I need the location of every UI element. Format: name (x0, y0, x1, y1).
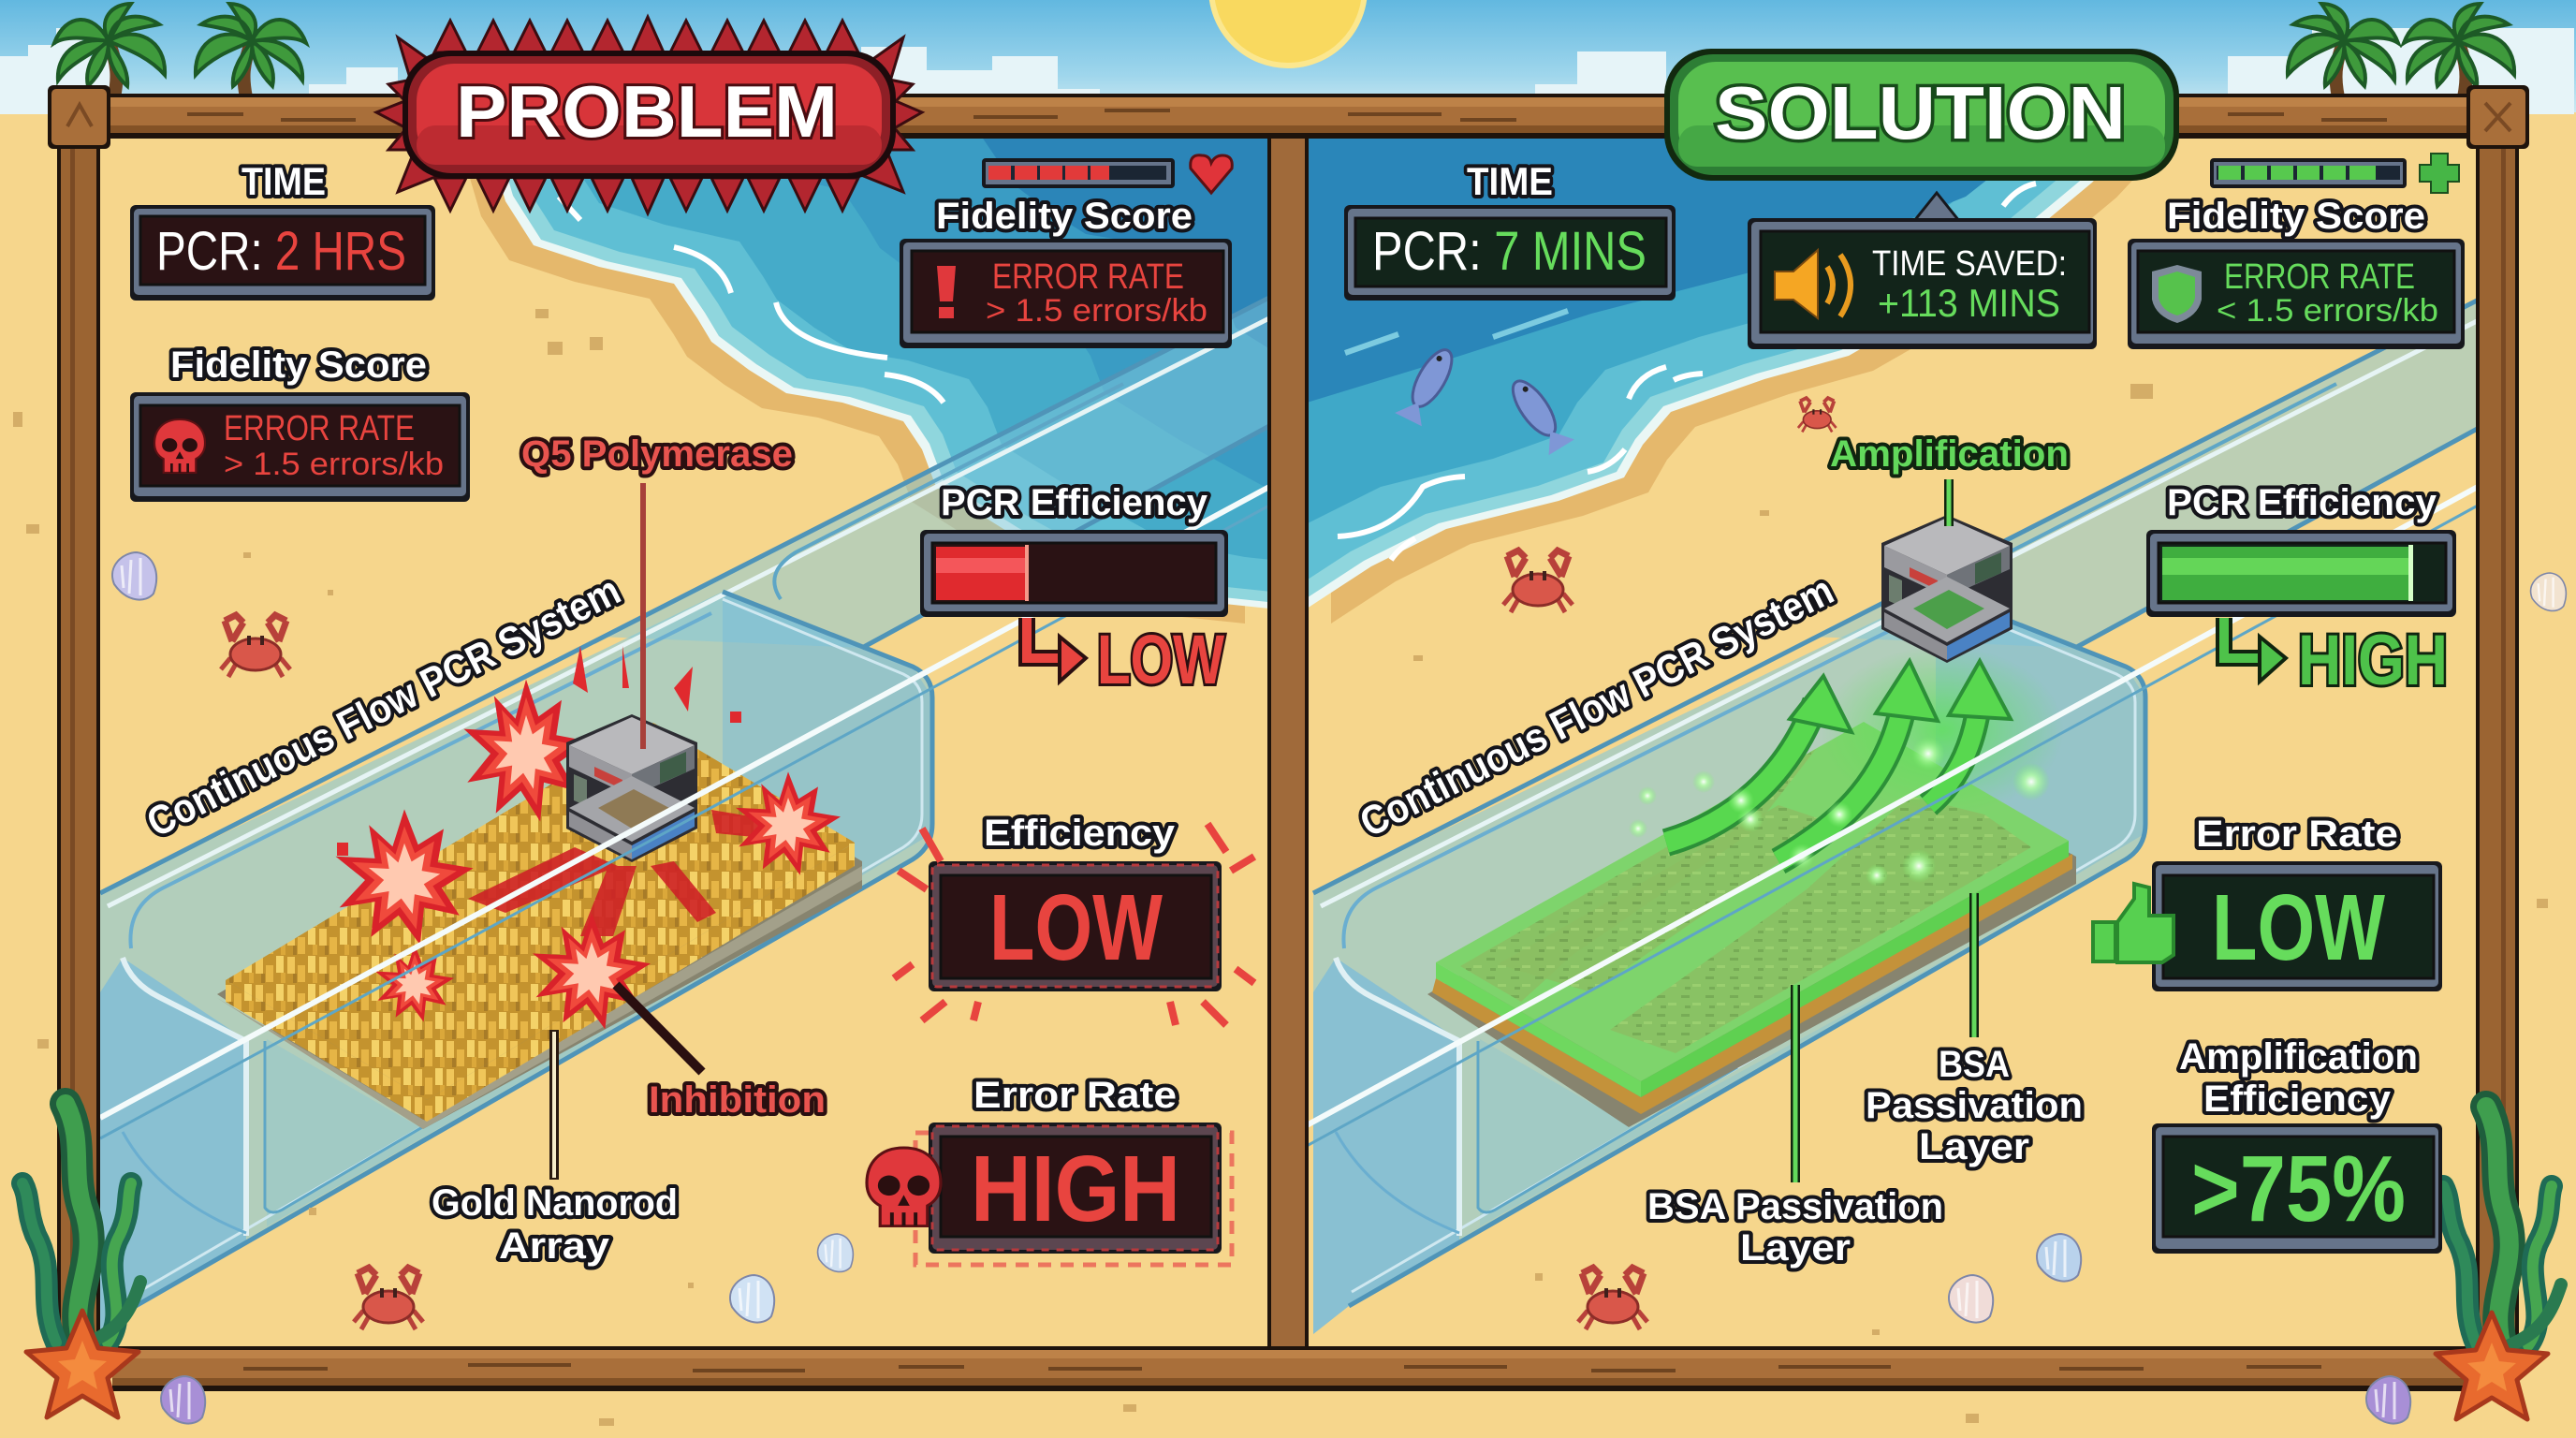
problem: fidelity score right (900, 196, 1232, 348)
frame: right post (2476, 94, 2519, 1390)
callout line: BSA upper (1969, 893, 1979, 1037)
solution: fidelity score: Fidelity Score (2167, 196, 2425, 237)
background: sky (0, 0, 2576, 116)
problem: TIME readout (130, 159, 435, 301)
solution: PCR efficiency bar (2146, 482, 2456, 700)
solution: time saved callout (1748, 193, 2097, 349)
sun (1211, 0, 1365, 66)
solution: error rate LOW panel: Error Rate (2196, 814, 2398, 855)
problem: error rate HIGH panel: HIGH (971, 1137, 1180, 1241)
shore crabs and shells: solution (1413, 384, 2153, 1335)
callout line: Amplification (1944, 479, 1954, 526)
badge: PROBLEM: PROBLEM (456, 70, 838, 153)
solution: fidelity score: < 1.5 errors/kb (2217, 293, 2438, 329)
solution: amplification efficiency panel: >75% (2191, 1137, 2406, 1241)
arrow: down to LOW (1027, 618, 1067, 658)
icon: shield (2152, 265, 2202, 323)
arrow: down to HIGH (2224, 618, 2265, 658)
problem: error rate HIGH panel (867, 1075, 1232, 1265)
sea: solution panel (1309, 139, 2132, 624)
solution: BSA label lower (1647, 1186, 1943, 1269)
solution: BSA label upper: Layer (1919, 1126, 2029, 1167)
solution: BSA label upper: BSA (1939, 1044, 2010, 1085)
problem: fidelity score left: Fidelity Score (170, 345, 427, 386)
problem: Q5 label: Q5 Polymerase (521, 433, 793, 475)
alert ticks (894, 824, 1254, 1025)
amplified particles (1629, 737, 2050, 887)
panel: solution scene (1241, 95, 2482, 1335)
solution: error rate LOW panel: LOW (2212, 875, 2385, 980)
solution: error rate LOW panel (2093, 814, 2442, 991)
printer: problem (566, 714, 697, 862)
icon: plus (2420, 154, 2459, 193)
solution: TIME readout: PCR: 7 MINS (1372, 221, 1647, 282)
problem: error rate HIGH panel: Error Rate (973, 1075, 1177, 1116)
problem: fidelity score right: > 1.5 errors/kb (986, 293, 1208, 329)
solution: TIME readout (1344, 159, 1676, 301)
frame: top beam (94, 94, 2481, 139)
white glass highlight (100, 487, 1269, 1118)
icon: skull large (867, 1148, 941, 1226)
callout line: Q5 Polymerase (640, 483, 646, 749)
problem: efficiency LOW panel (894, 813, 1254, 1025)
problem: TIME readout: PCR: 2 HRS (156, 221, 406, 282)
solution: BSA label upper: Passivation (1866, 1085, 2083, 1126)
problem: fidelity score left (130, 345, 470, 502)
amplification arrows (1666, 646, 2064, 861)
badge: SOLUTION: SOLUTION (1715, 71, 2126, 154)
solution: Amplification label: Amplification (1830, 433, 2069, 475)
frame: centre divider (1267, 131, 1309, 1357)
outer decor: seaweed, starfish and shells (13, 412, 2566, 1426)
solution: amplification efficiency panel: Amplification (2179, 1036, 2418, 1078)
solution: PCR efficiency bar: HIGH (2298, 621, 2448, 700)
solution: BSA label lower: Layer (1740, 1227, 1851, 1269)
badge: PROBLEM (376, 17, 922, 213)
badge: SOLUTION (1664, 49, 2179, 181)
problem: Inhibition label: Inhibition (649, 1079, 826, 1121)
solution: fidelity meter (2210, 154, 2459, 193)
solution: channel label: Continuous Flow PCR System (1353, 567, 1841, 846)
glass channel: solution (1313, 298, 2482, 1334)
solution: BSA label lower: BSA Passivation (1647, 1186, 1943, 1227)
problem: fidelity score left: ERROR RATE (224, 409, 415, 448)
problem: PCR efficiency bar: PCR Efficiency (941, 482, 1208, 523)
icon: thumbs up (2093, 884, 2174, 962)
frame: bottom beam (112, 1346, 2471, 1391)
problem: efficiency LOW panel: LOW (989, 875, 1163, 980)
panel: problem scene (100, 139, 1267, 1331)
solution: PCR efficiency bar: PCR Efficiency (2167, 482, 2437, 523)
fish (1395, 344, 1574, 457)
solution: time saved callout: +113 MINS (1878, 281, 2060, 325)
problem: Gold Nanorod label (432, 1182, 678, 1267)
callout line: Gold Nanorod (549, 1030, 559, 1180)
problem: PCR efficiency bar: LOW (1097, 621, 1224, 698)
red inhibition streaks (468, 810, 768, 936)
problem: fidelity meter (982, 155, 1232, 193)
callout line: BSA lower (1791, 985, 1800, 1182)
icon: skull (154, 419, 205, 473)
shore crabs and shells: problem (112, 309, 853, 1329)
frame: corner post right (2466, 85, 2529, 149)
blast: explosions (335, 646, 841, 1029)
solution: fidelity score: ERROR RATE (2224, 257, 2415, 297)
palm trees (54, 4, 2514, 97)
solution: amplification efficiency panel: Efficiency (2203, 1078, 2392, 1120)
frame: left post (57, 94, 100, 1353)
solution: TIME readout: TIME (1467, 159, 1553, 203)
solution: amplification efficiency panel (2152, 1036, 2442, 1254)
problem: TIME readout: TIME (242, 159, 326, 203)
problem: fidelity score right: ERROR RATE (992, 257, 1184, 297)
printer: solution (1881, 515, 2012, 663)
nanorod array platform (217, 723, 862, 1129)
problem: Gold Nanorod label: Array (499, 1225, 610, 1267)
callout line: Inhibition (616, 985, 702, 1072)
problem: PCR efficiency bar (920, 482, 1228, 698)
problem: efficiency LOW panel: Efficiency (984, 813, 1176, 854)
passivated sensor platform (1427, 722, 2076, 1127)
white glass highlight (1307, 487, 2478, 1125)
solution: time saved callout: TIME SAVED: (1872, 244, 2067, 284)
problem: Gold Nanorod label: Gold Nanorod (432, 1182, 678, 1224)
icon: speaker (1775, 250, 1851, 318)
solution: fidelity score (2128, 196, 2465, 349)
sea: problem panel (470, 139, 1267, 624)
problem: fidelity score right: Fidelity Score (936, 196, 1193, 237)
clouds (0, 28, 2574, 114)
problem: fidelity score left: > 1.5 errors/kb (224, 447, 444, 482)
solution: BSA label upper (1866, 1044, 2083, 1167)
icon: heart (1191, 155, 1232, 193)
glass channel: problem (100, 298, 1269, 1334)
frame: corner post left (48, 85, 110, 149)
icon: exclamation (937, 266, 956, 318)
problem: channel label: Continuous Flow PCR System (139, 567, 628, 846)
